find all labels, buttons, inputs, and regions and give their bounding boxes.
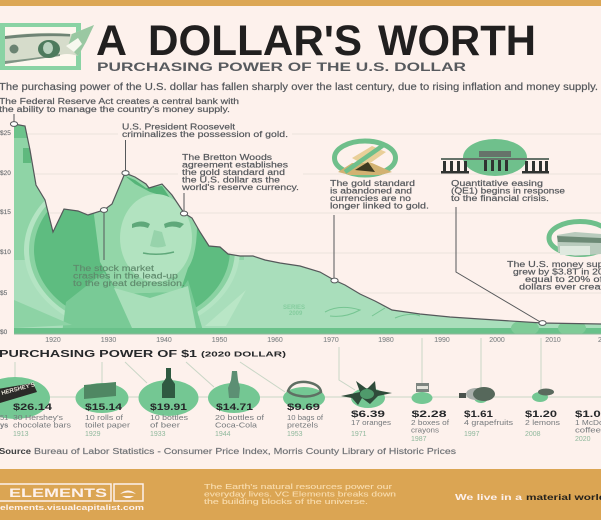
item: beer: $19.91	[150, 402, 188, 413]
item: beer: 1933	[150, 431, 166, 438]
title	[96, 17, 536, 65]
item: Coca-Cola: 20 bottles of	[215, 413, 265, 422]
callout: gold standard abandoned: currencies are no	[330, 194, 412, 203]
item: Coca-Cola: Coca-Cola	[215, 420, 258, 430]
item: pretzels	[283, 382, 325, 438]
x-axis year labels: 1970	[323, 337, 339, 344]
callout: gold standard abandoned	[330, 179, 429, 210]
callout: stock market crash	[73, 264, 185, 288]
x-axis year labels: 1930	[101, 337, 116, 344]
item: toilet paper: 1929	[85, 431, 101, 438]
callout: Bretton Woods: The Bretton Woods	[182, 153, 272, 162]
item: lemons	[525, 388, 560, 438]
collar	[114, 286, 196, 328]
item: crayons: 1987	[411, 436, 427, 443]
icon: money stack	[549, 222, 601, 256]
logo: ELEMENTS	[9, 486, 107, 500]
x-axis year labels: 1940	[156, 337, 172, 344]
item: Hershey's: 51	[0, 413, 8, 422]
intro text: The purchasing power of the U.S. dollar has fallen sharply over the last century, due to rising inflation and money supply.	[0, 82, 598, 93]
item: Hershey's: $26.14	[13, 402, 53, 413]
item: oranges: 1971	[351, 431, 367, 438]
item: Hershey's: 1913	[13, 431, 29, 438]
callout: money supply	[507, 260, 601, 292]
connectors to items	[0, 338, 601, 397]
callout: money supply: grew by $3.8T in 2020,	[513, 268, 601, 276]
callout: Bretton Woods: the gold standard and	[182, 168, 285, 177]
item: oranges: $6.39	[351, 409, 385, 420]
item: toilet paper: toilet paper	[85, 420, 131, 430]
title: WORTH	[378, 17, 536, 65]
hair	[94, 172, 197, 294]
item: toilet paper: $15.14	[85, 402, 123, 413]
item: Hershey's: 30 Hershey's	[13, 413, 63, 422]
item: Coca-Cola	[208, 371, 265, 438]
callout: money supply: equal to 20% of all	[525, 275, 601, 284]
callout: money supply: dollars ever created.	[519, 282, 601, 292]
x-axis year labels: 2000	[489, 337, 505, 344]
tagline: material world	[526, 493, 601, 502]
tagline	[455, 493, 601, 502]
item: grapefruits: 1997	[464, 431, 480, 438]
item: coffee: coffee	[575, 426, 601, 434]
x-axis year labels: 1950	[212, 337, 227, 344]
footer description: The Earth's natural resources power our	[204, 482, 393, 491]
item: grapefruits: $1.61	[464, 409, 494, 420]
callout: money supply: The U.S. money supply	[507, 260, 601, 269]
coat	[62, 272, 202, 328]
banknote signature	[325, 307, 420, 318]
item: toilet paper	[76, 382, 131, 438]
logo	[0, 484, 143, 501]
item: crayons: $2.28	[412, 409, 446, 420]
x-axis year labels: 1990	[434, 337, 450, 344]
item: crayons: crayons	[411, 426, 439, 434]
item: lemons: $1.20	[525, 409, 557, 420]
item: pretzels: 10 bags of	[287, 413, 324, 422]
url: elements.visualcapitalist.com	[0, 503, 144, 512]
item: pretzels: 1953	[287, 431, 303, 438]
value line	[14, 124, 601, 324]
callout: quantitative easing	[451, 179, 566, 203]
item: beer	[138, 368, 198, 438]
item: Hershey's: ys	[0, 420, 8, 430]
callout: Roosevelt: U.S. President Roosevelt	[122, 122, 236, 132]
callout: quantitative easing: Quantitative easing	[451, 179, 543, 188]
callout: Federal Reserve Act: The Federal Reserve Act creates a central bank with	[0, 97, 239, 106]
x-axis year labels: 1960	[267, 337, 283, 344]
footer description	[204, 482, 396, 506]
callout: quantitative easing: (QE1) begins in response	[451, 186, 566, 196]
callout: Bretton Woods: world's reserve currency.	[181, 183, 299, 192]
title: DOLLAR'S	[148, 17, 362, 65]
item: Hershey's: chocolate bars	[13, 420, 71, 430]
chart: dollar value over time: 2009	[289, 311, 303, 317]
callout: Roosevelt	[118, 122, 292, 140]
x-axis year labels: 2010	[545, 337, 561, 344]
footer	[0, 469, 601, 520]
item: toilet paper: 10 rolls of	[85, 413, 124, 422]
heading: purchasing power: (2020 DOLLAR)	[201, 350, 287, 358]
footer description: everyday lives. VC Elements breaks down	[204, 490, 396, 498]
item: pretzels: pretzels	[287, 420, 318, 430]
item: lemons: 2 lemons	[525, 418, 560, 427]
callout: stock market crash: The stock market	[73, 264, 155, 273]
item: Hershey's	[0, 377, 71, 438]
face	[120, 194, 192, 282]
chart: dollar value over time	[0, 114, 601, 344]
title: A	[96, 17, 127, 65]
source line: Bureau of Labor Statistics - Consumer Price Index, Morris County Library of Historic Prices	[34, 447, 456, 456]
item: grapefruits	[459, 387, 513, 438]
callout: gold standard abandoned: longer linked to gold.	[330, 202, 429, 210]
item: beer: 10 bottles	[150, 413, 188, 422]
area with banknote portrait	[14, 120, 601, 336]
footer description: the building blocks of the universe.	[204, 497, 368, 506]
y-axis labels: $5	[0, 290, 8, 297]
x-axis year labels: 1980	[378, 337, 394, 344]
callout: gold standard abandoned: is abandoned and	[330, 186, 412, 196]
leader lines	[14, 114, 542, 323]
item: grapefruits: 4 grapefruits	[464, 418, 513, 427]
callout: Bretton Woods	[178, 153, 303, 192]
y-axis labels: $20	[0, 170, 11, 177]
item: coffee: $1.00	[575, 409, 601, 420]
item: Coca-Cola: 1944	[215, 431, 231, 438]
callout: stock market crash: to the great depression.	[73, 279, 185, 288]
y-axis labels: $10	[0, 249, 11, 256]
item: oranges	[341, 381, 392, 438]
callout: Bretton Woods: the U.S. dollar as the	[182, 176, 281, 184]
tagline: We live in a	[455, 493, 523, 502]
icon: curled dollar bill	[0, 23, 94, 70]
subtitle: PURCHASING POWER OF THE U.S. DOLLAR	[97, 62, 467, 74]
item: beer: of beer	[150, 420, 181, 430]
callout: Federal Reserve Act: the ability to manage the country's money supply.	[0, 105, 230, 114]
x-axis year labels: 1920	[45, 337, 61, 344]
heading: purchasing power	[0, 348, 287, 360]
callout: Roosevelt: criminalizes the possession of gold.	[122, 130, 288, 139]
y-axis labels	[0, 130, 11, 336]
item: lemons: 2008	[525, 431, 541, 438]
item: coffee: 2020	[575, 436, 591, 443]
callout: quantitative easing: to the financial crisis.	[451, 194, 549, 203]
callout: gold standard abandoned: The gold standard	[330, 179, 415, 188]
y-axis labels: $15	[0, 209, 11, 216]
baseline	[14, 333, 601, 335]
item: Hershey's: HERSHEY'S	[1, 382, 36, 397]
callout: Bretton Woods: agreement establishes	[182, 160, 288, 170]
heading: purchasing power: PURCHASING POWER OF $1	[0, 348, 197, 360]
x-axis year labels	[45, 337, 561, 344]
callout: Federal Reserve Act	[0, 97, 239, 114]
item: oranges: 17 oranges	[351, 418, 391, 427]
item: coffee	[575, 409, 601, 443]
callout: stock market crash: crashes in the lead-up	[73, 272, 179, 280]
icon: gold bars crossed out	[334, 141, 396, 175]
item: crayons	[411, 383, 450, 443]
icon: Federal Reserve building	[441, 139, 549, 176]
banknote series text: SERIES	[283, 305, 305, 311]
y-axis labels: $0	[0, 329, 8, 336]
event markers	[10, 122, 546, 325]
item: pretzels: $9.69	[287, 402, 320, 413]
y-axis labels: $25	[0, 130, 11, 137]
item: Coca-Cola: $14.71	[216, 402, 254, 413]
top hair shadow	[125, 176, 170, 198]
item: crayons: 2 boxes of	[411, 418, 450, 427]
